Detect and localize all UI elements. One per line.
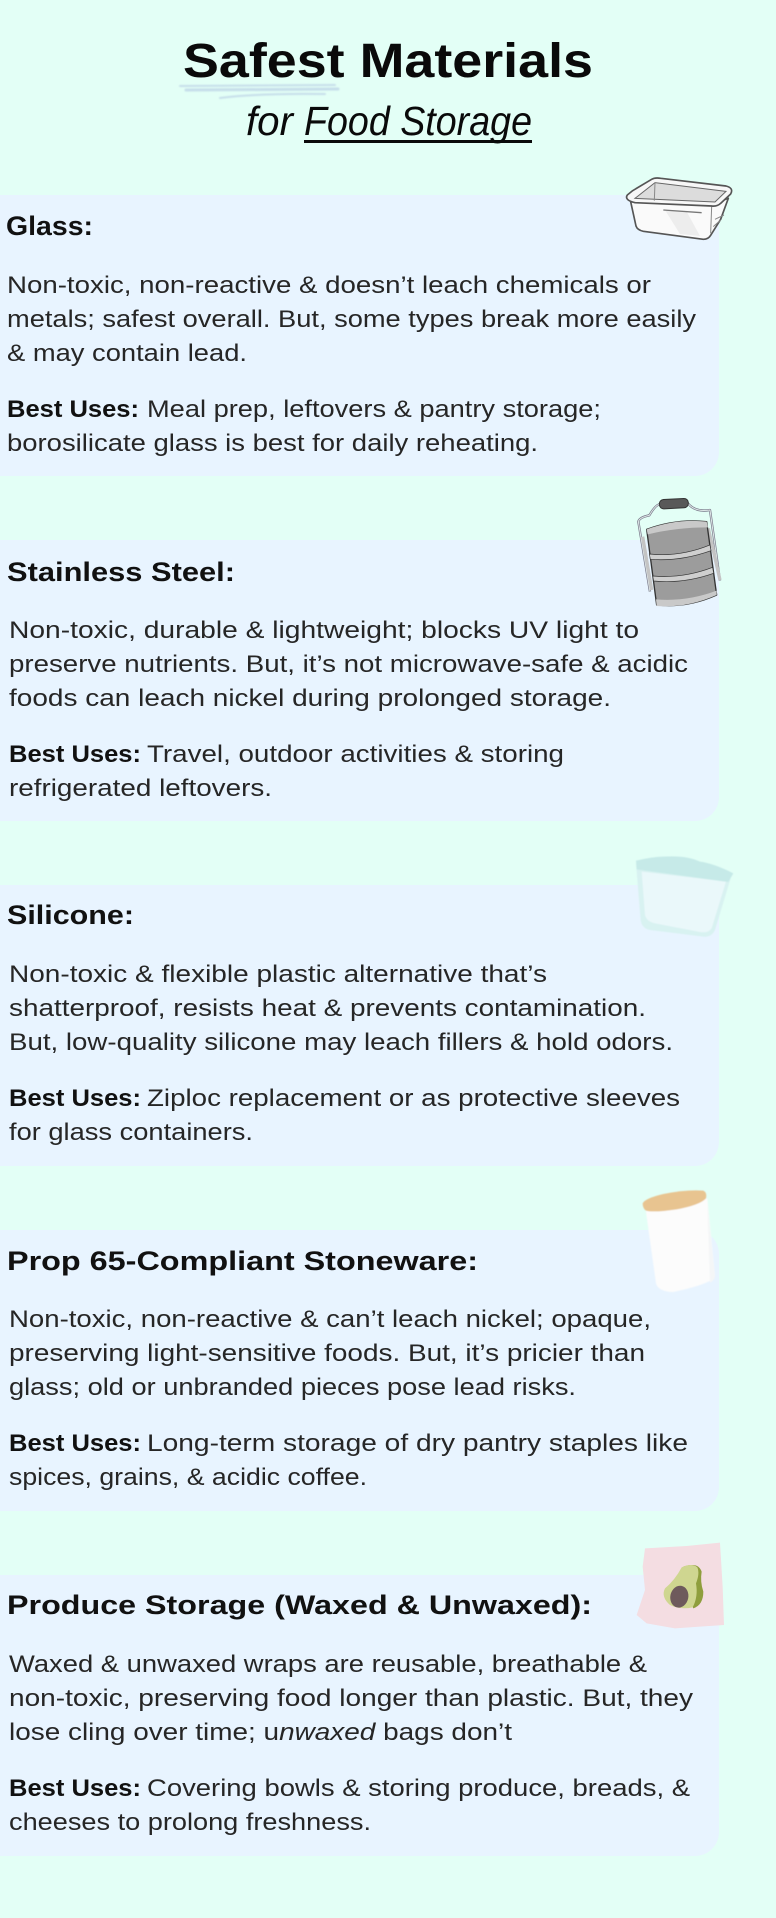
panel background — [0, 1230, 719, 1511]
panel: glass — [0, 195, 719, 476]
description: But, low-quality silicone may leach fillers & hold odors. — [9, 1029, 673, 1056]
best uses: Ziploc replacement or as protective sleeves — [147, 1085, 680, 1112]
description — [7, 272, 697, 367]
best uses: Best Uses: — [9, 1775, 141, 1802]
panel: silicone — [0, 885, 719, 1166]
description: preserving light-sensitive foods. But, it’s pricier than — [9, 1340, 645, 1367]
description: lose cling over time; u nwaxed bags don’t — [9, 1719, 512, 1746]
description: Non-toxic, non-reactive & can’t leach nickel; opaque, — [9, 1306, 651, 1333]
best uses: Travel, outdoor activities & storing — [147, 741, 564, 768]
best uses — [7, 396, 601, 457]
best uses: for glass containers. — [9, 1119, 253, 1146]
best uses — [9, 1430, 688, 1491]
description — [9, 1651, 694, 1746]
title line two: for — [246, 98, 295, 144]
description — [9, 961, 673, 1056]
description: Non-toxic, durable & lightweight; blocks UV light to — [9, 617, 639, 644]
description: & may contain lead. — [7, 340, 247, 367]
heading: glass: Glass: — [6, 211, 93, 241]
icon: stoneware jar — [643, 1190, 715, 1292]
best uses: Long-term storage of dry pantry staples like — [147, 1430, 688, 1457]
title brush stroke — [180, 85, 338, 98]
panel background — [0, 1575, 719, 1856]
heading: stainless steel: Stainless Steel: — [7, 557, 235, 587]
best uses: Best Uses: — [9, 1430, 141, 1457]
icon: silicone bag — [636, 856, 733, 937]
best uses: Best Uses: — [7, 396, 139, 423]
icon: avocado beeswax wrap — [637, 1543, 724, 1628]
description: Non-toxic, non-reactive & doesn’t leach chemicals or — [7, 272, 651, 299]
title — [180, 35, 593, 144]
icon: stainless steel tiffin — [638, 498, 720, 606]
heading: prop 65-compliant stoneware: Prop 65-Compliant Stoneware: — [7, 1246, 478, 1276]
best uses: refrigerated leftovers. — [9, 775, 272, 802]
panel background — [0, 195, 719, 476]
description: non-toxic, preserving food longer than plastic. But, they — [9, 1685, 694, 1712]
panel background — [0, 885, 719, 1166]
description: Non-toxic & flexible plastic alternative that’s — [9, 961, 547, 988]
best uses: Covering bowls & storing produce, breads, & — [147, 1775, 690, 1802]
description — [9, 617, 688, 712]
description — [9, 1306, 651, 1401]
panel: stoneware — [0, 1230, 719, 1511]
best uses — [9, 1085, 680, 1146]
best uses: Meal prep, leftovers & pantry storage; — [147, 396, 601, 423]
heading: silicone: Silicone: — [7, 900, 134, 930]
title line one: Safest Materials — [183, 35, 593, 88]
panel background — [0, 540, 719, 821]
description: shatterproof, resists heat & prevents contamination. — [9, 995, 646, 1022]
heading: produce storage: Produce Storage (Waxed & Unwaxed): — [7, 1590, 592, 1620]
best uses: cheeses to prolong freshness. — [9, 1809, 371, 1836]
best uses — [9, 1775, 690, 1836]
description: Waxed & unwaxed wraps are reusable, breathable & — [9, 1651, 647, 1678]
best uses: borosilicate glass is best for daily reheating. — [7, 430, 538, 457]
description: glass; old or unbranded pieces pose lead risks. — [9, 1374, 576, 1401]
best uses — [9, 741, 564, 802]
panel: stainless steel — [0, 540, 719, 821]
description: preserve nutrients. But, it’s not microwave-safe & acidic — [9, 651, 688, 678]
best uses: spices, grains, & acidic coffee. — [9, 1464, 367, 1491]
panel: produce storage — [0, 1575, 719, 1856]
icon: glass container — [627, 178, 732, 239]
description: foods can leach nickel during prolonged storage. — [9, 685, 611, 712]
best uses: Best Uses: — [9, 1085, 141, 1112]
title line two: Food Storage — [304, 98, 532, 144]
best uses: Best Uses: — [9, 741, 141, 768]
description: metals; safest overall. But, some types break more easily — [7, 306, 697, 333]
